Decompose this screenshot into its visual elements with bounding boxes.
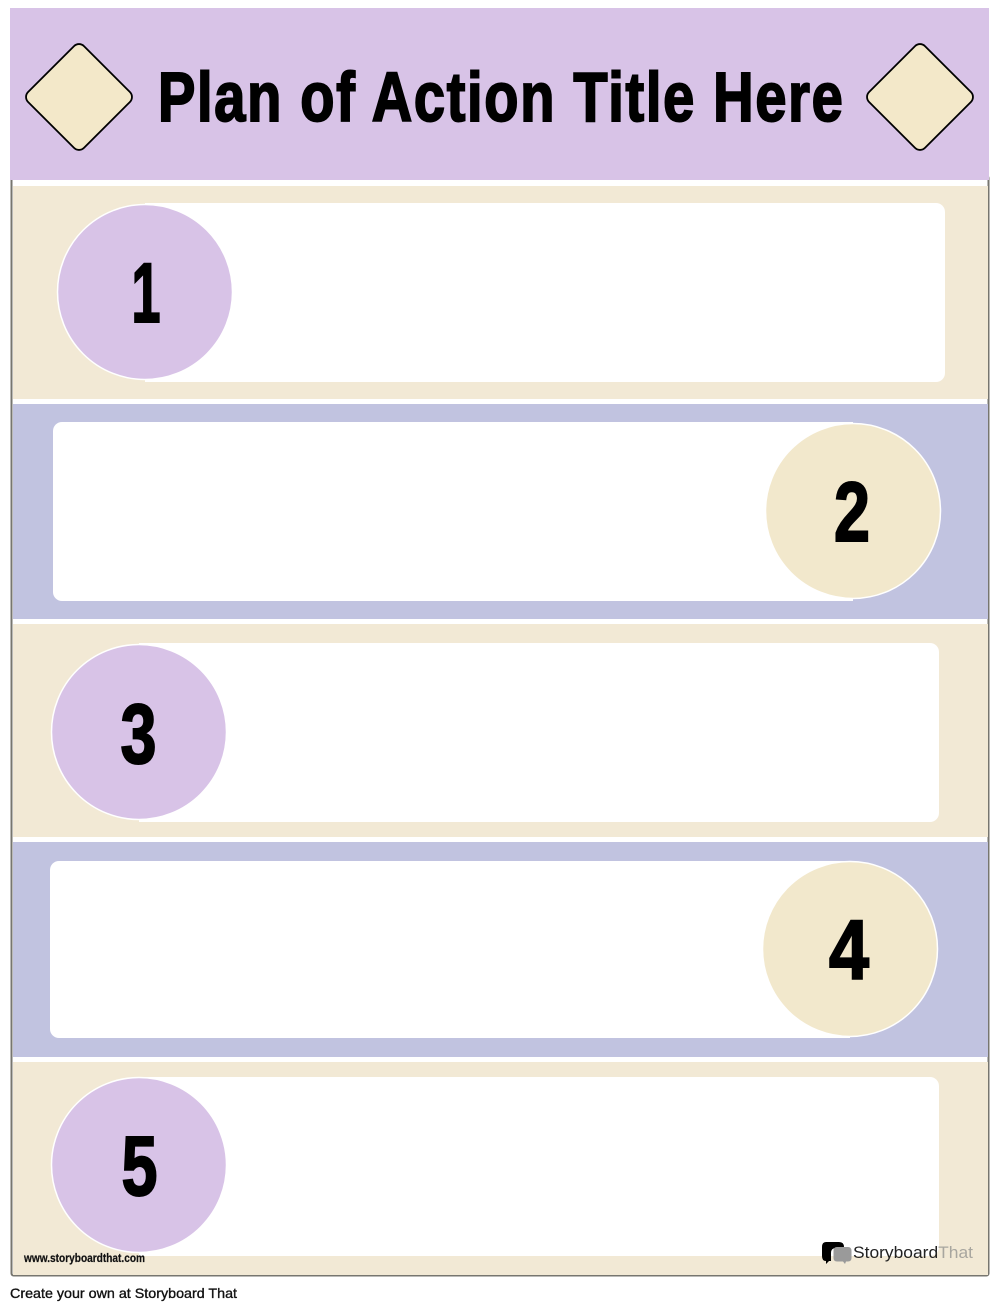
header banner: [10, 8, 989, 180]
step 3 number: 3: [120, 687, 156, 781]
step 3 number circle: [52, 644, 226, 820]
banner background: [10, 8, 989, 180]
step 3 band: [13, 624, 988, 837]
panel: step 5: [13, 1062, 988, 1275]
step 3 text box: [139, 643, 939, 822]
step 1 number circle: [58, 204, 232, 380]
logo: Storyboard That: [822, 1242, 973, 1264]
step 5 number: 5: [122, 1119, 158, 1213]
step 5 band: [13, 1062, 988, 1275]
step 1 number: 1: [132, 246, 160, 340]
step 5 number circle: [52, 1078, 226, 1252]
logo wordmark: StoryboardThat: [853, 1243, 973, 1262]
watermark url: www.storyboardthat.com: [23, 1253, 145, 1265]
footer credit: Create your own at Storyboard That: [10, 1285, 237, 1301]
icon: left diamond: [23, 41, 135, 153]
panel: step 2: [13, 404, 988, 619]
step 4 number: 4: [829, 903, 869, 997]
icon: right diamond: [864, 41, 976, 153]
step 2 number: 2: [834, 465, 870, 559]
step 4 band: [13, 842, 988, 1057]
step 1 band: [13, 186, 988, 399]
panel: step 3: [13, 624, 988, 837]
step 4 text box: [50, 861, 850, 1038]
title: Plan of Action Title Here: [158, 59, 843, 136]
step 2 number circle: [766, 424, 940, 598]
panel: step 4: [13, 842, 988, 1057]
panel: step 1: [13, 186, 988, 399]
step 2 text box: [53, 422, 853, 601]
icon: speech bubbles: [822, 1242, 852, 1264]
step 4 number circle: [762, 862, 938, 1036]
step 5 text box: [139, 1077, 939, 1256]
step 2 band: [13, 404, 988, 619]
step 1 text box: [145, 203, 945, 382]
